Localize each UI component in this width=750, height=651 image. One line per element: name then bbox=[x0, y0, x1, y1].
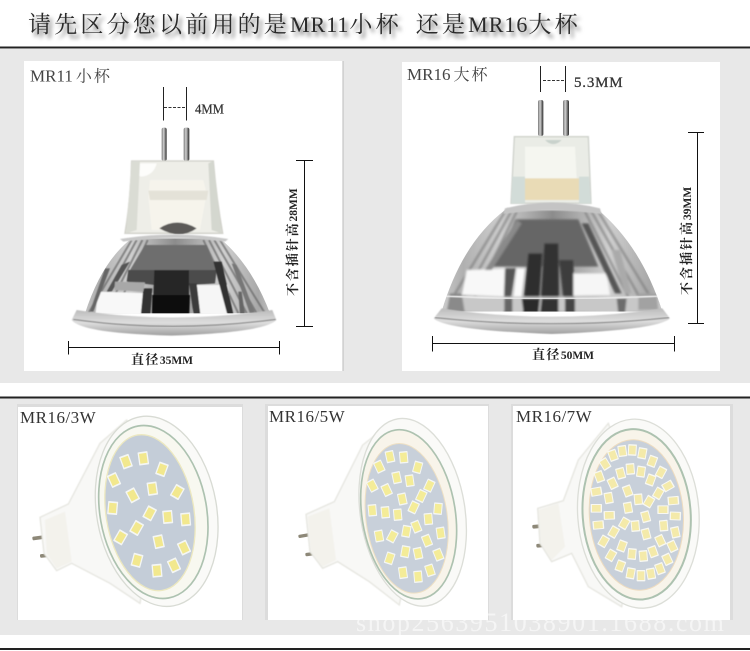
upper grey band bbox=[0, 49, 750, 383]
dimension: height 39MM bbox=[679, 132, 704, 324]
dimension: pin spacing 5.3MM bbox=[540, 66, 623, 92]
dimension: pin spacing 4MM: 4MM bbox=[195, 102, 224, 118]
dimension: height 28MM bbox=[285, 160, 313, 326]
bulb: MR11 bbox=[65, 128, 285, 336]
dimension: diameter 50MM bbox=[432, 336, 674, 362]
bulb: 3W LED lamp bbox=[32, 406, 232, 616]
label: MR11: MR11小杯 bbox=[30, 66, 112, 86]
rule above lower band bbox=[0, 396, 750, 398]
dimension: height 28MM: 不含插针高28MM bbox=[285, 188, 300, 296]
bulb: MR16 bbox=[425, 100, 680, 334]
watermark: shop2563951038901.1688.com bbox=[356, 608, 725, 637]
bulb: 5W LED lamp bbox=[298, 411, 479, 614]
label: MR16: MR16大杯 bbox=[407, 65, 489, 84]
label: MR16/3W: MR16/3W bbox=[20, 408, 97, 427]
panel: MR16 large cup bbox=[402, 62, 720, 371]
rule under title bbox=[0, 46, 750, 48]
panel: MR16 7W bbox=[511, 404, 733, 620]
rule at page bottom bbox=[0, 648, 750, 650]
dimension: pin spacing 5.3MM: 5.3MM bbox=[574, 75, 623, 91]
panel: MR11 small cup bbox=[24, 61, 344, 371]
dimension: diameter 35MM bbox=[68, 341, 280, 367]
lower grey band bbox=[0, 398, 750, 635]
bulb: 7W LED lamp bbox=[532, 415, 705, 612]
title: 请先区分您以前用的是MR11小杯 还是MR16大杯 bbox=[28, 12, 581, 37]
dimension: diameter 50MM: 直径50MM bbox=[532, 347, 594, 362]
label: MR16/5W: MR16/5W bbox=[269, 407, 346, 426]
label: MR16/7W: MR16/7W bbox=[516, 407, 593, 426]
dimension: pin spacing 4MM bbox=[164, 87, 224, 120]
panel: MR16 3W bbox=[17, 404, 243, 620]
dimension: height 39MM: 不含插针高39MM bbox=[679, 187, 694, 295]
panel: MR16 5W bbox=[265, 404, 489, 620]
dimension: diameter 35MM: 直径35MM bbox=[131, 352, 193, 367]
